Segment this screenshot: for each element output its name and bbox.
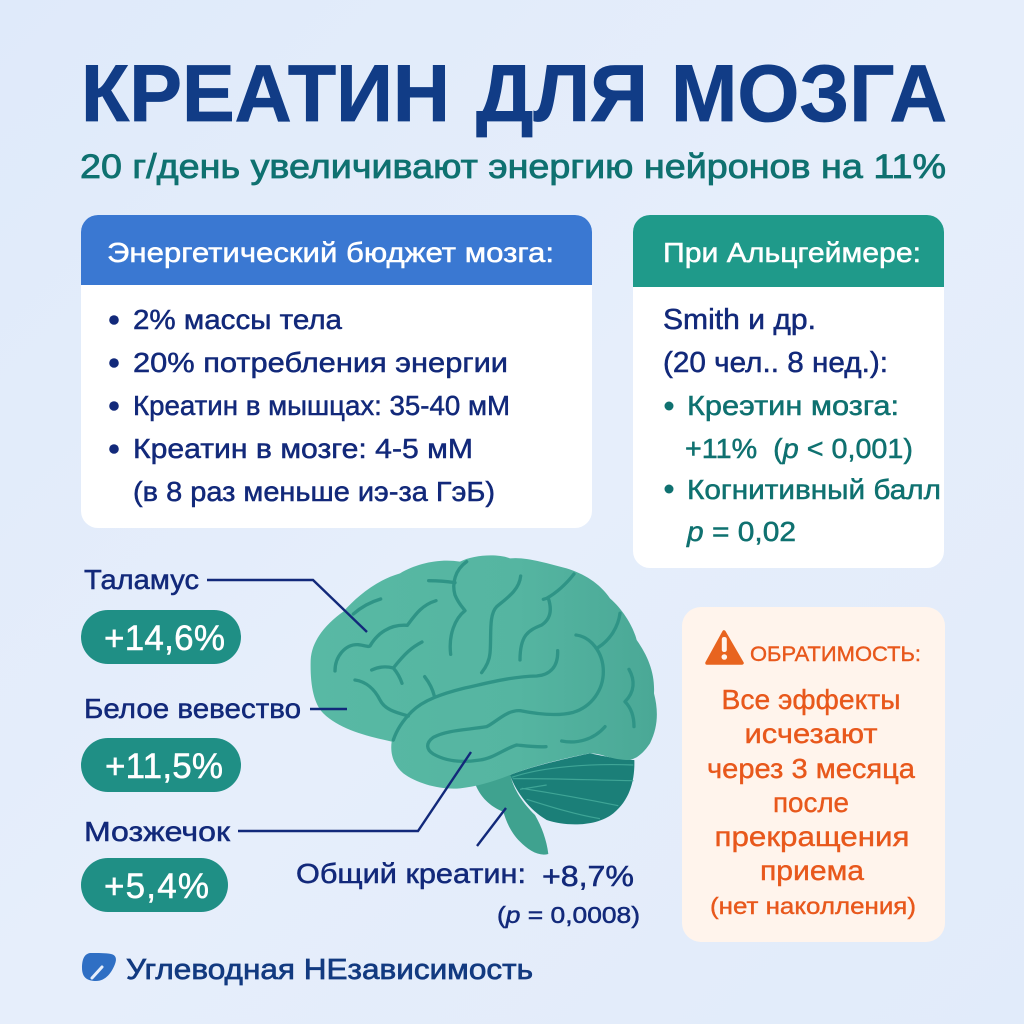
list: energy budget facts [109,304,510,507]
list: energy budget facts: 20% потребления энергии [133,347,508,378]
warning text [707,684,916,919]
label: white matter [81,693,301,792]
results list: +11% (p < 0,001) [685,433,913,464]
warning text: прекращения [714,821,910,852]
panel header: energy budget [81,215,592,285]
total creatine [296,858,640,928]
warning text: через 3 месяца [707,753,915,784]
panel: Alzheimer [633,215,944,568]
study description: Smith и др. [663,304,816,336]
subtitle: 20 г/день увеличивают энергию нейронов на 11% [80,148,946,186]
warning text: приема [760,855,864,886]
label: cerebellum: Мозжечок [84,816,231,847]
study description: (20 чел.. 8 нед.): [663,347,888,379]
total creatine: (p = 0,0008) [497,902,640,928]
panel header: Alzheimer [633,215,944,287]
list: energy budget facts: (в 8 раз меньше иэ-за ГэБ) [133,476,495,507]
study description [663,304,888,379]
heading: reversibility: ОБРАТИМОСТЬ: [750,643,921,666]
warning text: Все эффекты [722,684,900,715]
icon: warning [707,632,742,663]
total creatine: +8,7% [542,861,634,893]
results list [664,390,941,547]
leader line: total creatine [477,808,506,846]
cerebrum [311,555,657,789]
warning text: исчезают [744,718,878,749]
heading: energy budget: Энергетический бюджет мозга: [107,237,554,268]
warning text: (нет наколления) [710,893,916,919]
icon: brand leaf [82,953,116,981]
title [81,49,947,139]
badge: white matter: +11,5% [105,747,223,786]
list: energy budget facts: Креатин в мышцах: 35-40 мМ [133,390,510,421]
leader line: cerebellum [238,752,471,831]
title: ДЛЯ [476,49,648,139]
list: energy budget facts: Креатин в мозге: 4-5 мМ [133,433,473,464]
label: cerebellum [81,816,231,912]
title: КРЕАТИН [81,49,450,139]
title: МОЗГА [671,49,947,139]
cerebellum [510,753,634,824]
results list: p = 0,02 [686,516,796,547]
footer brand: Углеводная НЕзависимость [126,954,533,986]
label: white matter: Белое вевество [84,693,301,724]
badge: cerebellum: +5,4% [104,867,209,906]
label: thalamus: Таламус [84,564,199,595]
heading: Alzheimer: При Альцгеймере: [663,237,921,268]
list: energy budget facts: 2% массы тела [133,304,342,335]
badge: thalamus [81,610,241,664]
badge: cerebellum [81,858,228,912]
leader line: thalamus [207,580,367,632]
panel: energy budget [81,215,592,528]
badge: thalamus: +14,6% [104,619,225,658]
brain sulci [335,562,634,761]
brain stem [475,773,548,855]
total creatine: Общий креатин: [296,858,526,889]
badge: white matter [81,738,241,792]
leader line: white matter [310,708,347,710]
panel: reversibility [682,607,945,942]
brain illustration [311,555,657,855]
warning text: после [773,787,849,818]
label: thalamus [81,564,241,664]
results list: Когнитивный балл [687,474,941,505]
results list: Креэтин мозга: [687,390,899,421]
